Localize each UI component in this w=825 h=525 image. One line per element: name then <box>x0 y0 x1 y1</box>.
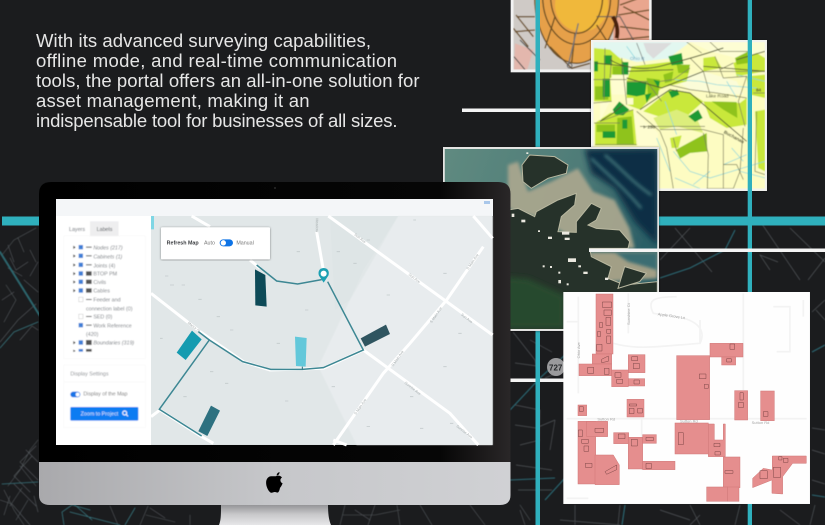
map pin <box>318 268 329 283</box>
building: slate <box>361 325 390 347</box>
layers panel: Boundaries (319) <box>93 341 134 347</box>
road labels: S Main Ave <box>429 306 443 324</box>
layers panel: BTOP PM <box>93 272 117 278</box>
map: pink parcel map: Sutton Rd <box>752 420 769 425</box>
map: green parcel map <box>591 40 767 191</box>
map: green parcel map: Buchanan <box>723 129 745 145</box>
map: pink parcel map: Ohio Ave <box>576 341 581 358</box>
sidebar <box>56 216 151 445</box>
road labels: S Main Ave <box>391 350 405 367</box>
map: pink parcel map: Sutton Rd <box>680 419 698 424</box>
map: green parcel map: I- 258 <box>643 125 656 130</box>
layers panel <box>64 236 145 359</box>
layers panel: Civils <box>93 280 106 286</box>
paragraph: With its advanced surveying capabilities, <box>36 30 371 51</box>
paragraph: asset management, making it an <box>36 90 310 111</box>
building: teal <box>177 331 202 360</box>
display settings panel: Display of the Map <box>83 392 127 398</box>
building: dark <box>255 269 267 307</box>
top bar link <box>484 201 490 204</box>
white line over satellite <box>589 248 825 252</box>
road network background: right <box>510 224 825 525</box>
road labels <box>187 218 480 439</box>
paragraph <box>36 30 420 131</box>
left accent <box>151 216 154 229</box>
building: blue-grey <box>198 406 220 436</box>
paragraph: tools, the portal offers an all-in-one solution for <box>36 70 420 91</box>
route badge: 727 <box>549 364 563 372</box>
map: pink parcel map: Sunshine Ct <box>626 302 631 325</box>
road network background: left <box>0 228 530 525</box>
sidebar contents <box>64 221 145 428</box>
map: orange street map <box>511 0 652 72</box>
layers panel: Cabinets (1) <box>93 254 123 260</box>
refresh panel: Refresh Map <box>167 240 199 246</box>
road labels: Meadow <box>315 218 319 233</box>
route badge <box>547 358 565 376</box>
refresh panel: Manual <box>236 240 254 246</box>
map: pink parcel map: Sutton Rd <box>597 417 615 422</box>
road labels: Manor St <box>187 321 201 333</box>
road labels: Sun Ave <box>353 233 367 244</box>
layers panel: Work Reference <box>93 323 132 329</box>
zoom button: Zoom to Project <box>81 412 119 418</box>
sidebar contents: Labels <box>97 227 113 233</box>
monitor chin <box>39 462 510 505</box>
road labels: Sun Ave <box>460 313 473 324</box>
paragraph: indispensable tool for businesses of all sizes. <box>36 110 398 131</box>
screen <box>56 199 493 445</box>
monitor stand <box>219 504 331 525</box>
map: green parcel map: Ohio R <box>630 56 645 61</box>
building: light <box>295 337 307 367</box>
refresh panel <box>161 227 270 259</box>
layers panel: connection label (0) <box>86 306 133 312</box>
layers panel: Cables <box>93 289 110 295</box>
paragraph: offline mode, and real-time communication <box>36 50 397 71</box>
layers panel: Nodes (217) <box>93 246 123 252</box>
road labels: Sunrise Ave <box>455 424 473 439</box>
road ticks <box>160 220 462 428</box>
white horizontal lines <box>462 108 592 382</box>
top bar <box>56 199 493 216</box>
layers panel: Joints (4) <box>93 263 115 269</box>
map: pink parcel map: Apple Grove Ln <box>658 311 686 320</box>
icon: apple logo <box>266 472 283 493</box>
refresh panel: Auto <box>204 240 215 246</box>
map: satellite image <box>443 147 659 332</box>
sidebar contents: Layers <box>69 227 85 233</box>
map: green parcel map: Lake Road <box>706 93 729 98</box>
tab bar <box>90 221 119 237</box>
layers panel: SED (0) <box>93 315 113 321</box>
layers panel: Feeder and <box>93 297 121 303</box>
road labels: Sunrise Ave <box>404 381 421 396</box>
road labels: S Main Ave <box>354 398 367 416</box>
display settings panel <box>64 365 145 428</box>
layers panel: (420) <box>86 332 99 338</box>
monitor bezel <box>39 182 510 462</box>
monitor <box>39 182 510 525</box>
camera <box>274 187 276 189</box>
map: green parcel map: 84 <box>756 87 762 92</box>
road labels: S Main Ave <box>466 253 480 271</box>
display settings panel: Display Settings <box>70 371 109 377</box>
road labels: Sun Ave <box>408 273 421 284</box>
map: pink parcel map <box>563 292 810 504</box>
map panel <box>151 216 493 445</box>
